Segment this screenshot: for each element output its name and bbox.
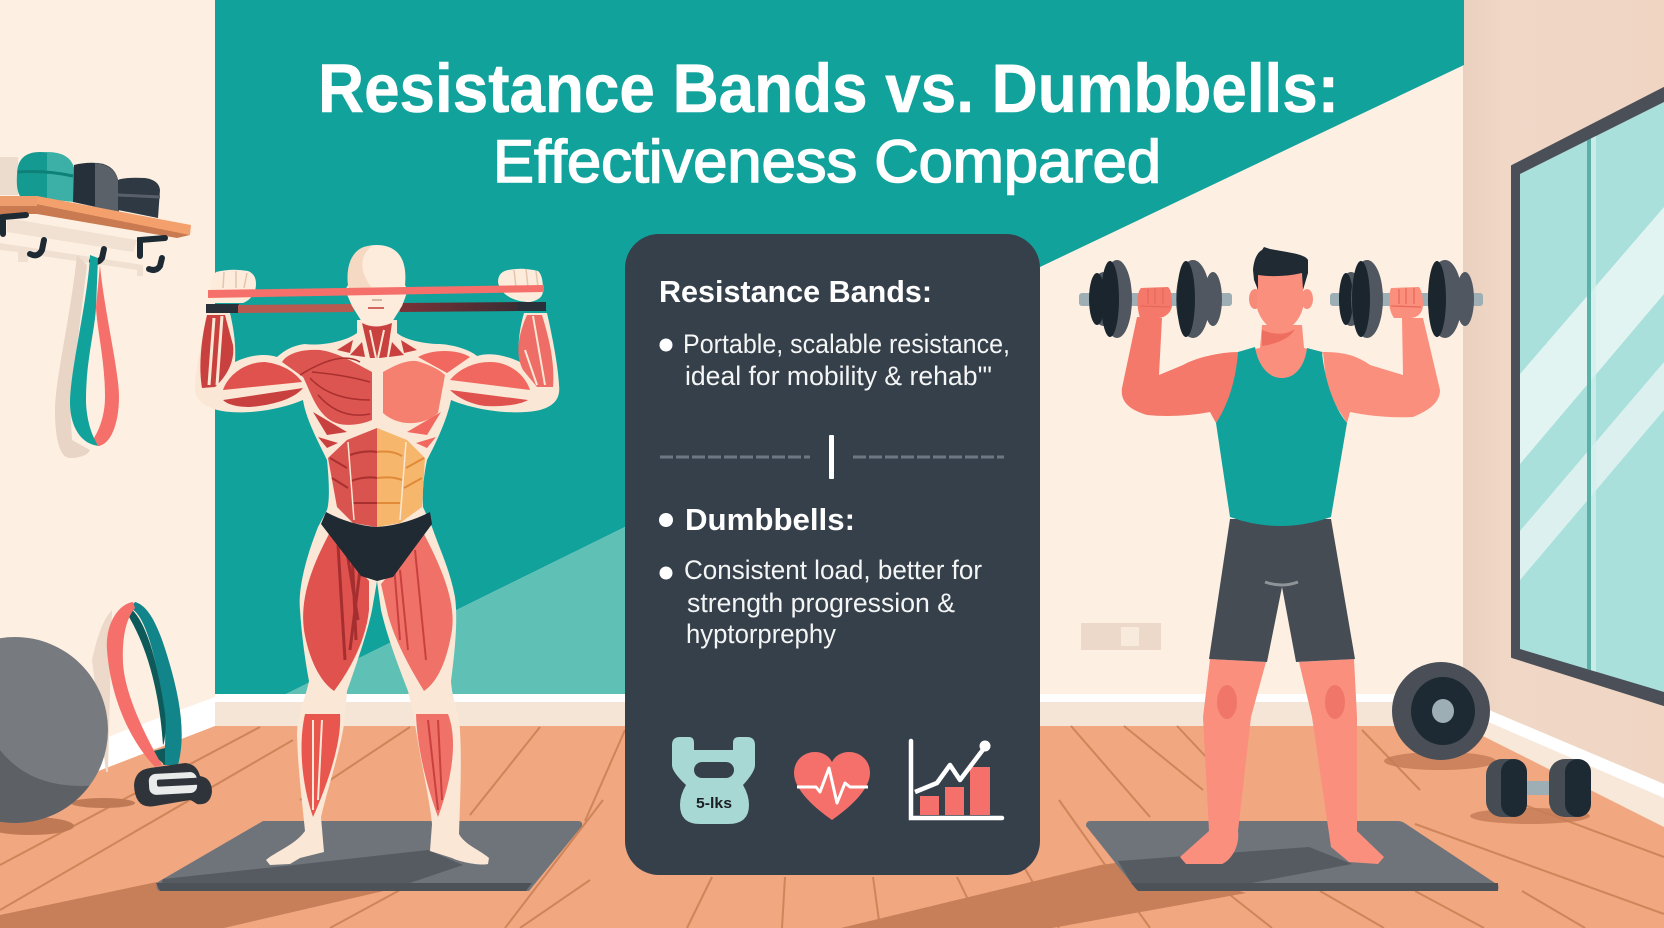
- band loop wall shadow: [92, 610, 112, 772]
- dark resistance band: [206, 302, 546, 313]
- floor shadow: left: [0, 882, 392, 928]
- icon: growth chart: [911, 740, 1002, 818]
- heading: dumbbells: Dumbbells:: [685, 502, 855, 537]
- head: [1249, 247, 1313, 346]
- dumbbells description: [684, 555, 982, 649]
- title line 1: Resistance Bands vs. Dumbbells:: [318, 50, 1339, 127]
- ribs: [313, 412, 347, 448]
- handle: [134, 763, 212, 807]
- neck muscles: [337, 323, 417, 358]
- title: [318, 50, 1339, 195]
- divider: [660, 435, 1004, 479]
- shelf with weights and hanging band: [0, 152, 191, 458]
- band shadow: [55, 255, 90, 458]
- knees: [1217, 685, 1237, 719]
- floor dumbbell: [1470, 759, 1591, 824]
- dumbbells description: Consistent load, better for: [684, 555, 982, 585]
- body outline: [195, 313, 559, 865]
- torso skin and neck: [1238, 325, 1323, 400]
- brackets and hooks: [3, 215, 165, 270]
- thigh muscles: [303, 534, 453, 691]
- right arm muscles: [450, 315, 553, 406]
- arms and shoulders: [1122, 317, 1440, 423]
- bullet: [659, 513, 673, 527]
- floor shadow: right: [841, 860, 1246, 928]
- baseboards: [0, 694, 1664, 832]
- title line 2: Effectiveness Compared: [493, 128, 1161, 195]
- left dumbbell: [1079, 260, 1232, 338]
- fists: [1137, 287, 1423, 318]
- legs: [1180, 659, 1384, 864]
- icon: kettlebell: 5-lks: [696, 795, 732, 812]
- resistance bands description: [683, 329, 1010, 391]
- dumbbells description: strength progression &: [687, 588, 955, 618]
- shelf board: [0, 196, 191, 238]
- left arm muscles: [200, 315, 303, 407]
- band loop with handle: [107, 602, 212, 807]
- mat: left: [156, 821, 582, 891]
- chest: [282, 350, 470, 425]
- head: [345, 245, 408, 326]
- fists: [209, 269, 543, 303]
- heading: resistance bands: Resistance Bands:: [659, 274, 932, 309]
- panel: comparison: [625, 234, 1040, 875]
- floor plate: [1384, 662, 1496, 770]
- calf muscles: [302, 714, 453, 817]
- dumbbells description: hyptorprephy: [686, 619, 836, 649]
- right dumbbell: [1330, 260, 1483, 338]
- exercise ball: [0, 637, 135, 840]
- shorts: [1209, 519, 1355, 662]
- icon: heart with pulse: [794, 752, 870, 820]
- icon: kettlebell: [672, 737, 755, 824]
- red resistance band: [208, 285, 544, 298]
- mirror: [1512, 88, 1664, 705]
- figure: muscle anatomy: [195, 245, 559, 865]
- resistance bands description: ideal for mobility & rehab'": [685, 361, 992, 391]
- weights: [17, 152, 160, 218]
- hanging band: [70, 255, 119, 446]
- wood floor: [0, 726, 1664, 928]
- wall plate: [1081, 623, 1161, 650]
- mat: right: [1086, 821, 1498, 891]
- figure: man with dumbbells: [1079, 247, 1483, 864]
- abs: [328, 428, 425, 527]
- bullet: [660, 338, 672, 352]
- resistance bands description: Portable, scalable resistance,: [683, 329, 1010, 359]
- briefs: [321, 512, 432, 581]
- bullet: [660, 566, 672, 580]
- tank top: [1216, 347, 1347, 526]
